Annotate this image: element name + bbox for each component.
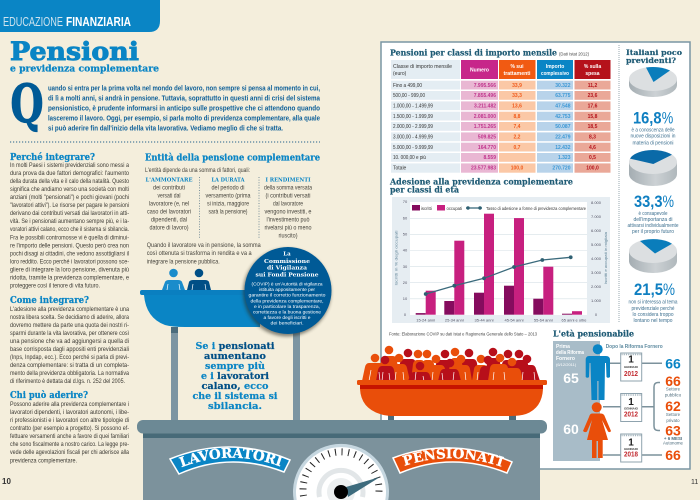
table header row: complessivo — [541, 71, 569, 77]
pie 21,5% — [628, 239, 678, 324]
scale base — [137, 420, 547, 500]
text block: Perché integrare?: Fra le possibili contromosse vi è quella di diminui- — [10, 234, 129, 241]
calendar 1 gennaio 2012: GENNAIO — [624, 365, 639, 369]
text block: Entità della pensione complementare: riuscito) — [278, 233, 298, 240]
text block: Chi può aderire? — [10, 390, 129, 464]
column: Numero: 7.995.566 — [474, 83, 496, 89]
new retirement ages: 63 — [665, 422, 681, 438]
column: % sui trattamenti: 8,8 — [514, 114, 521, 120]
column: Importo complessivo: 1.323 — [558, 155, 571, 161]
table labels: 3.000,00 - 4.999,99 — [393, 134, 433, 140]
column: Numero: 164.770 — [478, 145, 496, 151]
column: % sulla spesa: 23,6 — [588, 93, 598, 99]
right axis labels: 0 — [595, 312, 598, 317]
before-reform panel: 60 — [563, 421, 579, 437]
column: % sulla spesa: 11,2 — [588, 83, 597, 89]
new retirement ages: 66 — [665, 447, 681, 463]
column: % sui trattamenti — [511, 83, 523, 172]
column: Importo complessivo: 22.479 — [555, 134, 571, 140]
text block: Entità della pensione complementare: così ottenuta si trasforma in rendita e va a — [147, 250, 252, 257]
column: % sui trattamenti: 13,6 — [512, 104, 522, 110]
intro paragraph with drop cap: pensionistico, è prudente informarsi in anticipo sulle prospettive che ci attendono quando — [48, 104, 320, 113]
pie 16,8%: % — [662, 109, 673, 127]
pie 21,5%: lo considera troppo — [632, 312, 674, 318]
before-reform panel: (6/12/2011) — [556, 362, 577, 367]
intro paragraph with drop cap: uando si entra per la prima volta nel mondo del lavoro, non sempre si pensa al momento in cui, — [48, 84, 320, 93]
table labels: 5.000,00 - 9.999,99 — [393, 145, 433, 151]
callout: Commissione di Vigilanza — [243, 247, 332, 336]
calendar 1 gennaio 2012 — [621, 353, 642, 381]
text block: Entità della pensione complementare: l'investimento può — [266, 217, 310, 224]
central message: aumentano — [204, 352, 266, 362]
column: % sulla spesa: 8,3 — [589, 134, 596, 140]
central message: Se i pensionati — [196, 342, 275, 352]
column: Numero — [471, 83, 496, 172]
right axis labels: Iscritti e occupati in migliaia — [604, 231, 608, 284]
text block: Come integrare?: L'adesione alla previdenza complementare è una — [10, 306, 129, 313]
text block: Entità della pensione complementare: si inizia, maggiore — [207, 201, 249, 208]
pie 21,5%: non si interessa al tema — [628, 300, 678, 306]
column: Importo complessivo: 12.432 — [555, 145, 571, 151]
age class labels — [416, 318, 587, 322]
line: tasso di adesione — [424, 255, 573, 296]
callout: Commissione di Vigilanza: istituita appositamente per — [259, 287, 315, 292]
text block: Come integrare?: nostra libera scelta. Se decidiamo di aderire, allora — [10, 314, 129, 321]
text block: Chi può aderire?: Chi può aderire? — [10, 390, 88, 401]
figure: man — [586, 344, 610, 400]
column: % sulla spesa: 4,6 — [589, 145, 596, 151]
new retirement ages: Autonome — [663, 440, 684, 446]
new retirement ages: privato — [666, 418, 680, 423]
text block: Perché integrare?: voratori attivi calano, ecco che il sistema si sbilancia. — [10, 226, 129, 233]
connector lines and bracket — [603, 363, 662, 455]
column: Numero: 8.559 — [483, 155, 496, 161]
right axis labels: 8.000 — [591, 200, 602, 205]
text block: Perché integrare?: della durata della vita e il calo della natalità. Questo — [10, 178, 129, 185]
text block: Chi può aderire?: fettuare versamenti anche a favore di quei familiari — [10, 433, 129, 440]
title: e previdenza complementare — [10, 64, 159, 74]
column: % sulla spesa — [586, 83, 599, 172]
figure: woman — [583, 402, 611, 458]
table labels: Fino a 499,00 — [393, 83, 422, 89]
right axis labels: 1.000 — [591, 298, 602, 303]
left axis labels: 50 — [403, 232, 408, 237]
text block: Perché integrare?: significa che andiamo verso una società con molti — [10, 186, 129, 193]
column: % sulla spesa: 100,0 — [586, 166, 599, 172]
text block: Entità della pensione complementare: sarà la pensione) — [208, 209, 248, 216]
text block: Entità della pensione complementare: dal lavoratore — [273, 201, 303, 208]
calendar 1 gennaio 2012 second: 1 — [628, 397, 634, 408]
central message: sempre più — [205, 361, 265, 372]
column: % sui trattamenti: 33,9 — [512, 83, 522, 89]
scale illustration — [137, 246, 547, 500]
pie 16,8% — [629, 67, 677, 146]
text block: Come integrare?: mento della previdenza obbligatoria. La normativa — [10, 370, 129, 377]
before-reform panel — [553, 341, 600, 461]
callout: Commissione di Vigilanza: dei beneficiari. — [270, 321, 304, 326]
table row backgrounds — [391, 81, 610, 173]
back row figures — [398, 348, 530, 381]
table header row — [391, 60, 610, 79]
page number 11: 11 — [691, 479, 698, 486]
text block: Entità della pensione complementare: LA DURATA — [212, 178, 245, 184]
intro paragraph with drop cap — [10, 74, 321, 135]
pie 21,5%: previdenziale perché — [632, 306, 675, 312]
age class labels: 35-44 anni — [475, 318, 494, 322]
table labels: 2.000,00 - 2.999,99 — [393, 124, 433, 130]
pie 21,5%: lontano nel tempo — [634, 318, 673, 324]
new retirement ages: + 6 MESI — [664, 436, 682, 441]
callout: Commissione di Vigilanza: sui Fondi Pensione — [256, 272, 319, 278]
text block: Entità della pensione complementare — [145, 153, 320, 266]
central message: sbilancia. — [208, 402, 262, 412]
calendar 1 gennaio 2012: 2012 — [624, 371, 638, 378]
central message: calano, ecco — [202, 382, 268, 392]
text block: Entità della pensione complementare: I RENDIMENTI — [266, 178, 311, 184]
text block: Entità della pensione complementare: L'AMMONTARE — [146, 178, 192, 184]
central message: che il sistema si — [192, 392, 278, 402]
column: Numero: 1.751.265 — [474, 124, 496, 130]
text block: Come integrare?: denza complementare: si tratta di un completa- — [10, 362, 129, 369]
page number 10: 10 — [2, 477, 11, 486]
callout: Commissione di Vigilanza: correttezza e la buona gestione — [253, 310, 321, 314]
table header row: Importo — [546, 64, 564, 70]
text block: Entità della pensione complementare: versamento (prima — [206, 193, 251, 200]
table labels: 1.000,00 - 1.499,99 — [393, 104, 433, 110]
text block: Entità della pensione complementare: integrare la pensione pubblica. — [147, 258, 220, 266]
pie 33,3%: per il proprio futuro — [632, 229, 674, 235]
text block: Chi può aderire?: contratto (per esempio a progetto). Si possono ef- — [10, 425, 129, 432]
table labels: 500,00 - 999,00 — [393, 93, 425, 99]
column: Importo complessivo: 63.775 — [555, 93, 571, 99]
text block: Perché integrare?: derivano dai contributi versati dai lavoratori in atti- — [10, 210, 129, 217]
text block: Come integrare? — [10, 295, 129, 385]
panel: Italiani poco previdenti?: previdenti? — [626, 56, 677, 65]
text block: Come integrare?: una pensione che va ad aggiungersi a quella di — [10, 338, 129, 345]
before-reform panel: Fornero — [556, 356, 575, 362]
title — [10, 37, 159, 74]
workers in left bowl — [162, 269, 211, 290]
left bowl — [140, 290, 260, 327]
left axis labels: 40 — [403, 248, 408, 253]
central message: e i lavoratori — [201, 372, 270, 382]
column: % sui trattamenti: 33,3 — [512, 93, 522, 99]
intro paragraph with drop cap: si può aderire fin dall'inizio della vita lavorativa. Vediamo meglio di che si tratta. — [48, 124, 283, 133]
heading: Adesione alla previdenza complementare: Adesione alla previdenza complementare — [389, 176, 573, 186]
left axis labels — [394, 199, 408, 317]
text block: Perché integrare? — [10, 152, 129, 289]
column: Importo complessivo: 30.322 — [555, 83, 571, 89]
new retirement ages: pubblico — [665, 392, 682, 398]
text block: Perché integrare?: loro reddito. Ecco perché i lavoratori possono sce- — [10, 258, 129, 265]
table labels: 10. 000,00 e più — [393, 155, 426, 161]
text block: Entità della pensione complementare: dipendenti, dal — [151, 217, 187, 224]
column: Numero: 2.081.000 — [474, 114, 496, 120]
column: Numero: 3.211.482 — [474, 104, 496, 110]
pie 21,5%: % — [663, 281, 675, 299]
age class labels: 65 anni e oltre — [562, 318, 587, 322]
table header row: % sui — [510, 64, 524, 70]
column: % sulla spesa: 18,5 — [588, 124, 598, 130]
calendar 1 gennaio 2012 second: GENNAIO — [624, 406, 639, 410]
text block: Chi può aderire?: vede delle agevolazioni fiscali per chi aderisce alla — [10, 449, 129, 456]
text block: Perché integrare?: ridotta, tramite la previdenza complementare, e — [10, 274, 129, 281]
text block: Entità della pensione complementare: datore di lavoro) — [150, 225, 188, 232]
text block: Entità della pensione complementare: rivelarsi più o meno — [264, 225, 312, 232]
text block: Perché integrare?: dura prova da due fattori demografici: l'aumento — [10, 170, 129, 177]
calendar 1 gennaio 2012 second — [621, 394, 642, 422]
calendar 1 gennaio 2012: 1 — [628, 355, 634, 366]
text block: Entità della pensione complementare: vengono investiti, e — [264, 209, 312, 216]
right axis labels: 7.000 — [591, 214, 602, 219]
callout: Commissione di Vigilanza: garantire il corretto funzionamento — [248, 293, 326, 298]
text block: Entità della pensione complementare: Entità della pensione complementare — [145, 153, 320, 164]
text block: Come integrare?: dovremo mettere da parte una quota dei nostri ri- — [10, 322, 129, 329]
text block: Entità della pensione complementare: (i contributi versati — [266, 193, 310, 200]
text block: Entità della pensione complementare: della somma versata — [264, 185, 312, 192]
table header row: trattamenti — [504, 71, 531, 77]
section tab: Educazione Finanziaria: FINANZIARIA — [66, 15, 131, 29]
column: Numero: 509.825 — [478, 134, 496, 140]
intro paragraph with drop cap: lasceremo il lavoro. Oggi, per esempio, si parla molto di previdenza complementare, alla quale — [48, 114, 320, 123]
panel: Italiani poco previdenti? — [626, 48, 682, 324]
column: Importo complessivo: 47.548 — [555, 104, 571, 110]
pie 33,3%: attivarsi individualmente — [628, 223, 679, 229]
retirement age graphic — [553, 341, 684, 463]
new retirement ages: 66 — [665, 373, 681, 389]
table header row: % sulla — [584, 64, 601, 70]
table header row: (euro) — [393, 71, 407, 77]
new retirement ages: 66 — [665, 356, 681, 372]
text block: Perché integrare?: anziani (molti "pensionati") e pochi giovani (pochi — [10, 194, 129, 201]
text block: Perché integrare?: pochi disagi ai cittadini, che vedono assottigliarsi il — [10, 250, 129, 257]
scale posts — [171, 325, 516, 421]
middle row figures — [362, 346, 490, 381]
left axis labels: 10 — [403, 296, 408, 301]
intro paragraph with drop cap: di lì a molti anni, si andrà in pensione. Tuttavia, soprattutto in questi anni di crisi del sistema — [48, 94, 321, 103]
callout: Commissione di Vigilanza: (COVIP) è un'Autorità di vigilanza — [252, 282, 323, 286]
retirement age graphic: Dopo la Riforma Fornero — [606, 344, 663, 350]
new retirement ages: Settore — [666, 386, 681, 392]
callout: Commissione di Vigilanza: a favore degli iscritti e — [264, 315, 311, 320]
column: % sui trattamenti: 7,4 — [514, 124, 521, 130]
before-reform panel: della Riforma — [556, 350, 584, 356]
column: Numero: 23.577.983 — [471, 166, 496, 172]
calendar 1 gennaio 2018: 1 — [628, 437, 634, 448]
text block: Chi può aderire?: previdenza complementare. — [10, 457, 77, 464]
column: % sulla spesa: 0,5 — [589, 155, 596, 161]
pensioners crowd — [362, 346, 540, 381]
right bowl — [357, 380, 547, 416]
pie 33,3% — [628, 150, 679, 235]
text block: Come integrare?: base corrisposta dagli appositi enti previdenziali — [10, 346, 129, 353]
heading: Adesione alla previdenza complementare: per classi di età — [390, 184, 459, 194]
right axis labels: 4.000 — [591, 256, 602, 261]
left axis labels: 0 — [404, 312, 407, 317]
heading: Pensioni per classi di importo mensile: (Dati Istat 2012) — [559, 52, 589, 56]
pie 16,8%: 16,8 — [633, 109, 662, 127]
callout: Commissione di Vigilanza: della previdenza complementare, — [250, 298, 324, 303]
text block: Entità della pensione complementare: dei contributi — [153, 185, 185, 192]
text block: Come integrare?: Come integrare? — [10, 295, 89, 306]
chart legend: Tasso di adesione a forme di previdenza complementare — [486, 206, 587, 211]
age class labels: 55-64 anni — [534, 318, 553, 322]
heading: L'età pensionabile: L'età pensionabile — [553, 329, 634, 339]
pie 33,3%: è consapevole — [638, 211, 668, 217]
table labels — [393, 83, 433, 172]
right axis labels: 2.000 — [591, 284, 602, 289]
right axis labels: 3.000 — [591, 270, 602, 275]
table: pensions by monthly amount — [391, 60, 610, 173]
column: Importo complessivo: 50.087 — [555, 124, 571, 130]
table labels: Totale — [393, 166, 407, 172]
calendar 1 gennaio 2018: GENNAIO — [624, 447, 639, 451]
text block: Perché integrare?: vità. Se i pensionati aumentano sempre più, e i la- — [10, 218, 129, 225]
chart legend: occupati — [446, 206, 462, 211]
bar and line chart: adesione by age — [392, 197, 610, 323]
table header row: spesa — [585, 71, 600, 77]
central message — [192, 342, 278, 412]
section tab: Educazione Finanziaria — [0, 0, 160, 32]
section tab: Educazione Finanziaria: EDUCAZIONE — [3, 15, 63, 29]
text block: Entità della pensione complementare: Quando il lavoratore va in pensione, la somma — [147, 242, 261, 249]
source note: Fonte: Elaborazione COVIP su dati Istat e Ragioneria Generale dello Stato – 2013 — [389, 331, 537, 337]
text block: Chi può aderire?: ri professionisti e i lavoratori con altre tipologie di — [10, 417, 129, 424]
column: Importo complessivo: 270.720 — [552, 166, 571, 172]
pie 16,8%: è a conoscenza delle — [632, 128, 675, 134]
table labels: 1.500,00 - 1.999,99 — [393, 114, 433, 120]
pie 16,8%: materia di pensioni — [632, 140, 674, 146]
panel: Italiani poco previdenti?: Italiani poco — [626, 48, 682, 57]
heading: Adesione alla previdenza complementare — [389, 176, 573, 194]
text block: Entità della pensione complementare: caso dei lavoratori — [147, 209, 191, 216]
left axis labels: 60 — [403, 216, 408, 220]
calendar 1 gennaio 2018 — [621, 434, 642, 462]
calendar 1 gennaio 2012 second: 2012 — [624, 412, 638, 419]
banner: PENSIONATI: PENSIONATI — [402, 448, 504, 467]
left axis labels: Iscritti in % degli occupati — [394, 230, 398, 286]
left axis labels: 20 — [403, 280, 408, 285]
column: % sui trattamenti: 0,7 — [514, 145, 521, 151]
chart legend: iscritti — [421, 206, 432, 211]
new retirement ages — [663, 356, 684, 463]
text block: Entità della pensione complementare: lavoratore (e, nel — [149, 201, 189, 208]
left axis labels: 70 — [403, 199, 408, 204]
text block: Perché integrare?: gliere di integrare la loro pensione, divenuta più — [10, 266, 129, 273]
panel: right page data — [381, 42, 690, 469]
column: % sulla spesa: 17,6 — [588, 104, 598, 110]
text block: Perché integrare?: proteggere così il tenore di vita futuro. — [10, 282, 100, 289]
banner: LAVORATORI: LAVORATORI — [178, 448, 282, 468]
age class labels: 25-34 anni — [445, 318, 464, 322]
right axis labels: 5.000 — [591, 242, 602, 247]
callout: Commissione di Vigilanza: Commissione — [264, 259, 310, 265]
table header row: Classe di importo mensile — [393, 64, 452, 70]
pie 33,3%: dell'importanza di — [634, 217, 672, 223]
age class labels: 45-54 anni — [505, 318, 524, 322]
table header row: Numero — [470, 68, 489, 74]
gauge — [293, 444, 389, 500]
callout: Commissione di Vigilanza: e in particolare la trasparenza, — [254, 304, 320, 309]
text block: Entità della pensione complementare: L'entità dipende da una somma di fattori, quali: — [145, 167, 250, 174]
column: % sui trattamenti: 2,2 — [514, 134, 521, 140]
text block: Chi può aderire?: che sono fiscalmente a nostro carico. La legge pre- — [10, 441, 129, 448]
column: % sulla spesa: 15,8 — [588, 114, 598, 120]
callout: Commissione di Vigilanza: La — [283, 252, 291, 258]
front row figures — [376, 355, 540, 381]
column: Numero: 7.855.496 — [474, 93, 496, 99]
text block: Perché integrare?: "lavoratori attivi"). Le risorse per pagare le pensioni — [10, 202, 129, 209]
pie 33,3%: 33,3 — [634, 193, 662, 211]
before-reform panel: Prima — [556, 344, 570, 350]
new retirement ages: Settore — [666, 412, 681, 417]
text block: Entità della pensione complementare: versati dal — [158, 193, 180, 200]
column: % sui trattamenti: 100,0 — [511, 166, 523, 172]
intro paragraph with drop cap: Q — [10, 74, 44, 135]
text block: Perché integrare?: In molti Paesi i sistemi previdenziali sono messi a — [10, 162, 129, 169]
chart legend — [412, 205, 587, 211]
heading: Pensioni per classi di importo mensile: Pensioni per classi di importo mensile — [390, 48, 557, 58]
calendar 1 gennaio 2018: 2018 — [624, 452, 638, 459]
pie 21,5%: 21,5 — [634, 281, 663, 299]
text block: Entità della pensione complementare: del periodo di — [212, 185, 244, 192]
before-reform panel: 65 — [563, 370, 579, 386]
callout: Commissione di Vigilanza: di Vigilanza — [267, 266, 307, 272]
age class labels: 15-24 anni — [416, 318, 435, 322]
text block: Perché integrare?: Perché integrare? — [10, 152, 95, 163]
text block: Come integrare?: (Inps, Inpdap, ecc.). Ecco perché si parla di previ- — [10, 354, 129, 361]
new retirement ages: 62 — [665, 398, 681, 414]
pie 16,8%: nuove disposizioni in — [630, 134, 676, 140]
pie 33,3%: % — [662, 193, 674, 211]
text block: Chi può aderire?: lavoratori dipendenti, i lavoratori autonomi, i libe- — [10, 409, 129, 416]
column: Importo complessivo: 42.753 — [555, 114, 571, 120]
right axis labels: 6.000 — [591, 228, 602, 233]
right axis labels — [591, 200, 608, 317]
bars: occupati — [426, 214, 582, 315]
text block: Come integrare?: di riferimento è dettata dal d.lgs. n. 252 del 2005. — [10, 378, 125, 385]
text block: Perché integrare?: re l'importo delle pensioni. Questo però crea non — [10, 242, 129, 249]
column: Importo complessivo — [552, 83, 571, 172]
bars: iscritti — [416, 286, 572, 315]
text block: Come integrare?: sparmi durante la vita lavorativa, per ottenere così — [10, 330, 129, 337]
title: Pensioni — [10, 37, 139, 66]
text block: Chi può aderire?: Possono aderire alla previdenza complementare i — [10, 401, 129, 408]
left axis labels: 30 — [403, 264, 408, 269]
